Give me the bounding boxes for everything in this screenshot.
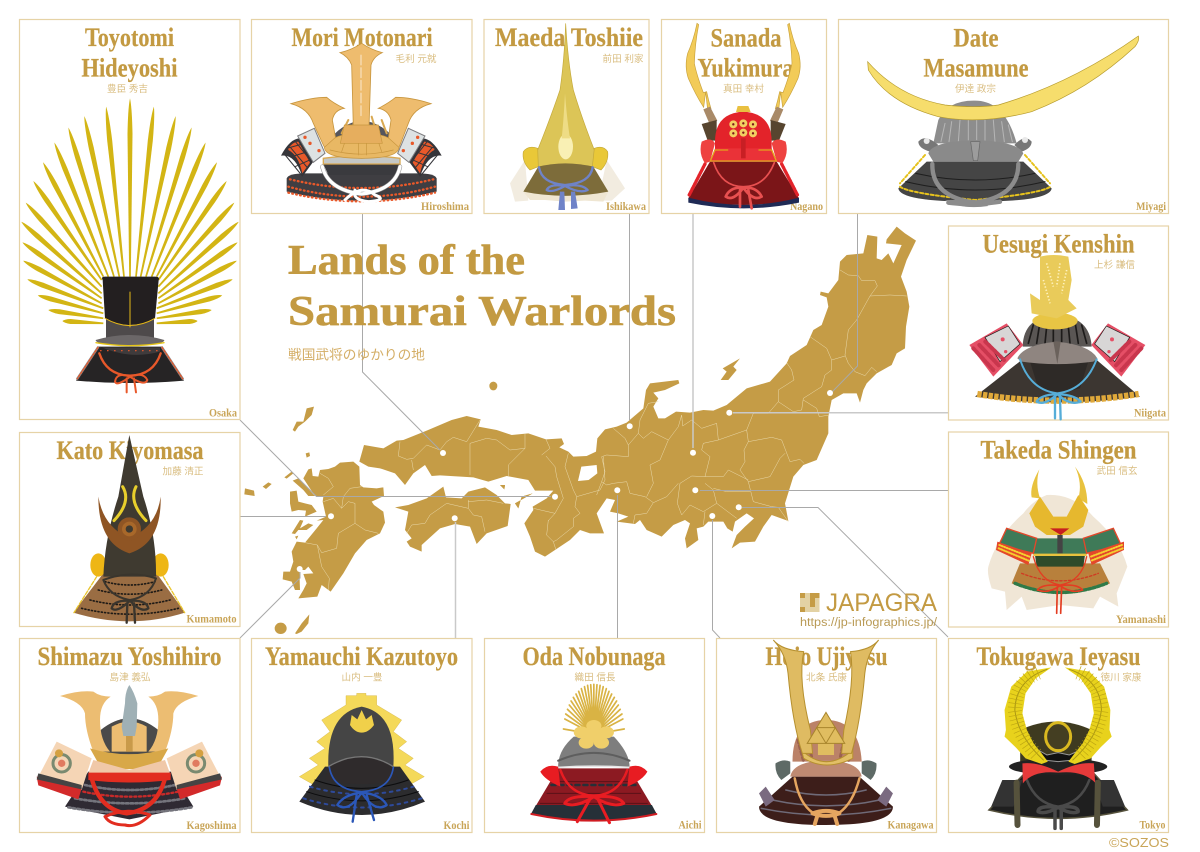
panel: Kato Kiyomasa: 加藤 清正	[162, 466, 204, 478]
panel: Date Masamune: Date	[954, 24, 998, 52]
panel: Sanada Yukimura: Nagano	[790, 201, 823, 213]
panel: Hojo Ujiyasu	[716, 638, 936, 832]
title: Lands of the	[288, 238, 525, 284]
panel: Mori Motonari	[252, 20, 472, 214]
icon: Uesugi helmet	[969, 255, 1145, 419]
icon: Shimazu helmet	[37, 685, 222, 826]
panel: Tokugawa Ieyasu: Tokugawa Ieyasu	[976, 642, 1140, 671]
logo: JAPAGRA: JAPAGRA	[826, 589, 937, 617]
icon: Mori helmet	[281, 43, 442, 202]
panel: Uesugi Kenshin: Niigata	[1134, 408, 1166, 420]
panel: Hojo Ujiyasu: Hojo Ujiyasu	[766, 642, 888, 671]
panel: Toyotomi Hideyoshi: 豊臣 秀吉	[107, 83, 148, 95]
panel: Toyotomi Hideyoshi: Osaka	[209, 408, 237, 420]
panel: Sanada Yukimura: Sanada	[710, 24, 782, 52]
panel: Oda Nobunaga	[484, 638, 704, 832]
Sado island	[721, 358, 740, 380]
panel: Uesugi Kenshin	[948, 226, 1168, 420]
Honshu island	[359, 227, 916, 557]
title: Samurai Warlords	[288, 289, 676, 335]
panel: Sanada Yukimura: Yukimura	[698, 54, 794, 82]
panel: Maeda Toshiie: Maeda Toshiie	[495, 23, 643, 52]
panel: Yamauchi Kazutoyo: Kochi	[444, 820, 470, 832]
panel: Date Masamune: Masamune	[924, 54, 1028, 82]
panel: Oda Nobunaga: Aichi	[678, 820, 702, 832]
panel: Kato Kiyomasa: Kato Kiyomasa	[56, 436, 204, 465]
panel: Date Masamune: 伊達 政宗	[955, 83, 996, 95]
leader lines	[240, 214, 948, 638]
panel: Oda Nobunaga: 織田 信長	[574, 672, 616, 684]
Lake Biwa	[578, 465, 597, 481]
copyright: ©SOZOS	[1109, 836, 1169, 850]
panel: Mori Motonari: Hiroshima	[421, 201, 469, 213]
panel: Tokugawa Ieyasu	[948, 638, 1168, 832]
panel: Date Masamune	[838, 20, 1168, 214]
panel: Tokugawa Ieyasu: 徳川 家康	[1100, 672, 1142, 684]
panel: Toyotomi Hideyoshi: Toyotomi	[85, 23, 174, 52]
panel: Maeda Toshiie: Ishikawa	[606, 201, 646, 213]
panel: Shimazu Yoshihiro: 島津 義弘	[110, 672, 151, 684]
panel: Maeda Toshiie: 前田 利家	[602, 53, 644, 65]
icon: Takeda helmet	[988, 467, 1127, 613]
panel: Yamauchi Kazutoyo: 山内 一豊	[342, 672, 383, 684]
panel: Yamauchi Kazutoyo	[252, 638, 472, 832]
panel: Toyotomi Hideyoshi: Hideyoshi	[82, 54, 178, 82]
panel: Hojo Ujiyasu: 北条 氏康	[806, 672, 848, 684]
panel: Mori Motonari: Mori Motonari	[292, 23, 432, 52]
map of Japan	[244, 227, 916, 634]
panel: Sanada Yukimura: 真田 幸村	[723, 83, 765, 95]
prefecture borders west	[305, 420, 605, 590]
panel: Uesugi Kenshin: Uesugi Kenshin	[982, 230, 1135, 258]
logo: JAPAGRA	[800, 589, 938, 629]
panel: Shimazu Yoshihiro: Kagoshima	[186, 820, 237, 832]
panel: Date Masamune: Miyagi	[1136, 201, 1167, 213]
panel: Mori Motonari: 毛利 元就	[396, 53, 437, 65]
icon: Tokugawa helmet	[989, 667, 1127, 828]
Awaji island	[515, 493, 533, 508]
panel: Takeda Shingen: 武田 信玄	[1096, 465, 1138, 477]
panel: Takeda Shingen: Yamanashi	[1116, 614, 1167, 626]
icon: Toyotomi helmet	[20, 98, 240, 392]
panel: Takeda Shingen: Takeda Shingen	[980, 436, 1137, 464]
panel: Toyotomi Hideyoshi	[20, 20, 240, 420]
panel: Kato Kiyomasa: Kumamoto	[186, 614, 237, 626]
panel: Oda Nobunaga: Oda Nobunaga	[522, 642, 666, 671]
panel: Yamauchi Kazutoyo: Yamauchi Kazutoyo	[265, 642, 458, 671]
icon: Date helmet	[868, 36, 1139, 207]
panel: Shimazu Yoshihiro: Shimazu Yoshihiro	[38, 642, 222, 671]
subtitle: 戦国武将のゆかりの地	[288, 348, 426, 362]
location dots	[297, 390, 833, 572]
panel: Kato Kiyomasa	[20, 432, 240, 626]
icon: Oda helmet	[531, 684, 656, 823]
prefecture borders	[597, 270, 907, 525]
icon: Kato helmet	[73, 435, 185, 623]
panel: Hojo Ujiyasu: Kanagawa	[888, 820, 934, 832]
panel: Shimazu Yoshihiro	[20, 638, 240, 832]
panel: Takeda Shingen	[948, 432, 1168, 627]
panel: Tokugawa Ieyasu: Tokyo	[1140, 820, 1166, 832]
panel: Maeda Toshiie	[484, 20, 649, 214]
outlying islands	[244, 407, 533, 634]
Kyushu island	[283, 462, 385, 598]
panel: Sanada Yukimura	[662, 20, 826, 214]
panel: Uesugi Kenshin: 上杉 謙信	[1094, 259, 1136, 271]
title	[288, 238, 676, 335]
icon: Maeda helmet	[510, 23, 625, 210]
icon: Sanada helmet	[686, 23, 800, 208]
icon: Hojo helmet	[759, 640, 893, 825]
logo: JAPAGRA: https://jp-infographics.jp/	[800, 617, 938, 629]
Shikoku island	[395, 487, 511, 552]
icon: Yamauchi helmet	[299, 693, 425, 822]
